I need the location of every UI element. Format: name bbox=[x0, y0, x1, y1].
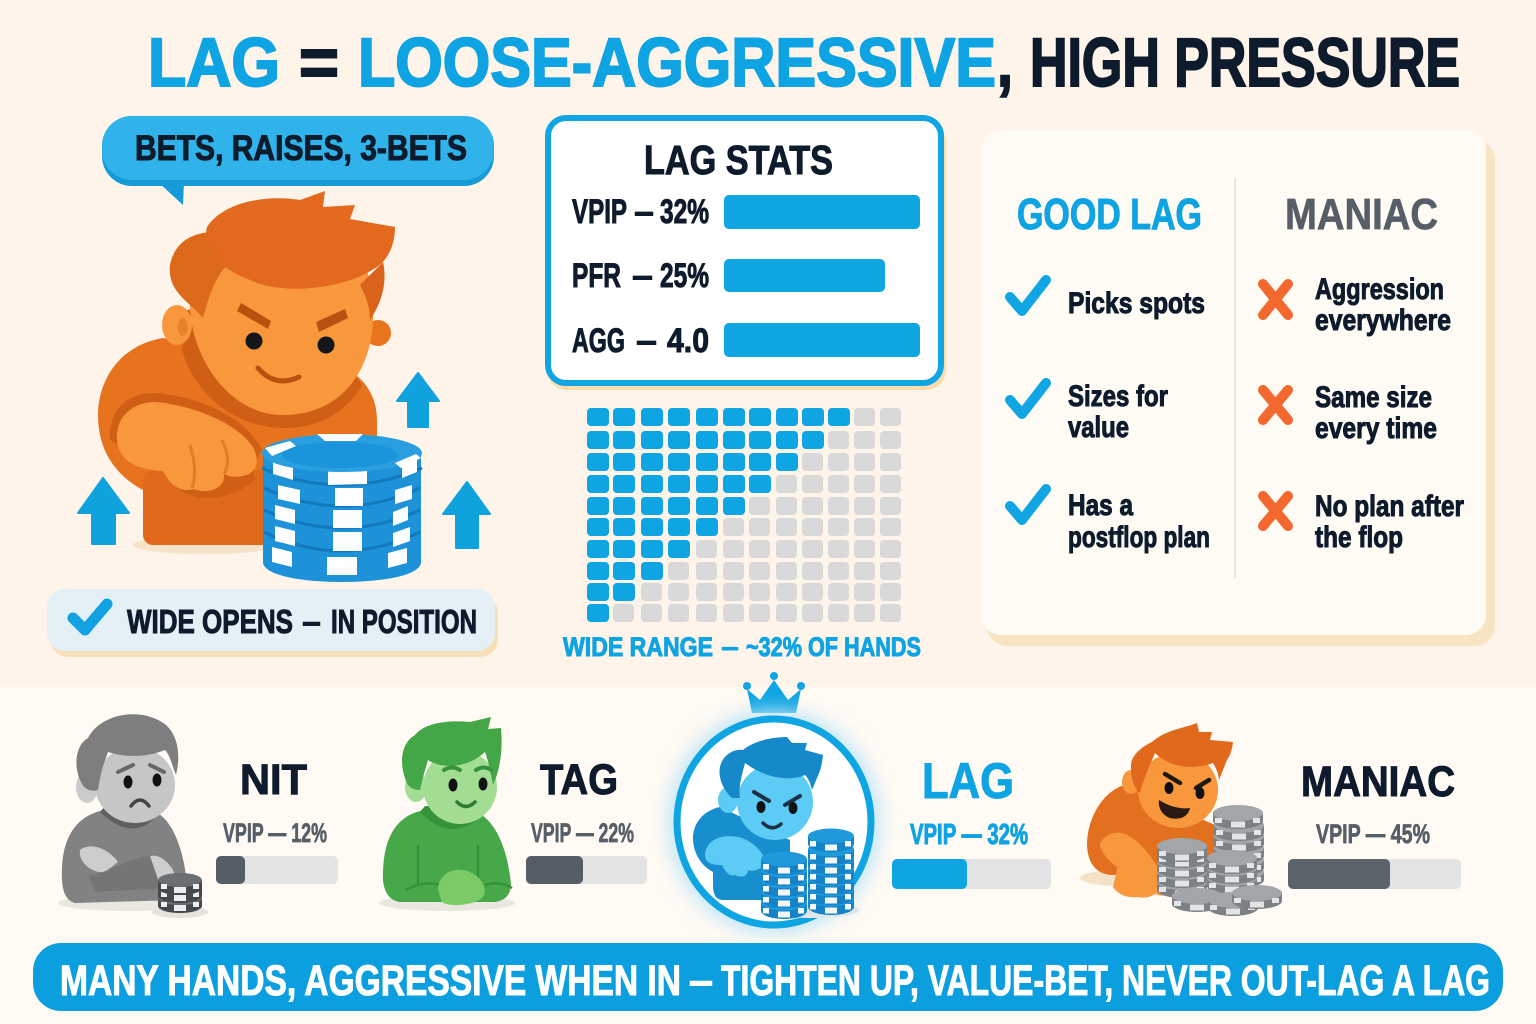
bar: maniac VPIP bbox=[1288, 859, 1461, 889]
item: sizes for value bbox=[1010, 380, 1168, 444]
hand range grid bbox=[587, 408, 901, 622]
label: LAG bbox=[892, 753, 1051, 889]
stat: AGG: 4.0 bbox=[667, 322, 709, 360]
bottom band background bbox=[0, 687, 1536, 1024]
icon: crown bbox=[743, 672, 805, 713]
column: good LAG bbox=[1010, 190, 1210, 554]
icon: check bbox=[73, 604, 107, 630]
icon: blue poker chip stack bbox=[262, 434, 422, 582]
stat: AGG bbox=[572, 322, 920, 360]
item: postflop plan: postflop plan bbox=[1068, 521, 1210, 554]
item: aggression everywhere bbox=[1263, 273, 1451, 337]
grid caption bbox=[563, 632, 921, 662]
item: picks spots: Picks spots bbox=[1068, 287, 1205, 320]
grid caption: WIDE RANGE bbox=[563, 632, 713, 662]
label: NIT: NIT bbox=[240, 756, 307, 804]
title: LOOSE-AGGRESSIVE bbox=[358, 24, 996, 101]
icon: up arrow left bbox=[78, 478, 129, 544]
item: sizes for value: value bbox=[1068, 411, 1129, 444]
item: postflop plan: Has a bbox=[1068, 489, 1133, 522]
stat: AGG: AGG bbox=[572, 322, 625, 360]
item: no plan bbox=[1263, 490, 1464, 554]
title: , bbox=[997, 24, 1013, 101]
figure: LAG player in ring bbox=[668, 710, 880, 934]
stat: PFR: 25% bbox=[660, 257, 709, 295]
callout: wide opens in position: — bbox=[303, 603, 320, 640]
panel: good LAG vs maniac bbox=[981, 130, 1495, 646]
column: maniac bbox=[1263, 190, 1464, 554]
item: same size: every time bbox=[1315, 412, 1437, 445]
speech bubble: bets, raises, 3-bets bbox=[102, 116, 494, 205]
item: same size bbox=[1263, 381, 1437, 445]
label: maniac: MANIAC bbox=[1301, 758, 1455, 806]
icon: small dark chip stack bbox=[152, 873, 208, 918]
title bbox=[148, 24, 1460, 101]
panel: LAG stats: LAG STATS bbox=[644, 137, 833, 183]
panel: LAG stats bbox=[547, 118, 946, 390]
item: same size: Same size bbox=[1315, 381, 1432, 414]
item: aggression everywhere: everywhere bbox=[1315, 304, 1451, 337]
item: postflop plan bbox=[1010, 489, 1210, 554]
bar: LAG VPIP bbox=[892, 859, 1051, 889]
figure: maniac player bbox=[1080, 723, 1233, 898]
stat: AGG: — bbox=[637, 322, 656, 360]
stat: PFR: — bbox=[633, 257, 652, 295]
icon: blue chip stacks bbox=[761, 828, 860, 919]
stat: PFR bbox=[572, 257, 885, 295]
speech bubble: bets, raises, 3-bets: BETS, RAISES, 3-BETS bbox=[135, 129, 467, 168]
title: LAG bbox=[148, 24, 280, 101]
takeaway banner bbox=[33, 943, 1503, 1011]
stat: PFR: PFR bbox=[572, 257, 621, 295]
label: LAG: LAG bbox=[922, 753, 1014, 809]
icon: grey chip piles bbox=[1157, 805, 1282, 916]
label: LAG: VPIP — 32% bbox=[910, 819, 1028, 851]
stat: VPIP: — bbox=[635, 193, 653, 231]
bar: TAG VPIP bbox=[526, 856, 647, 884]
label: maniac: VPIP — 45% bbox=[1316, 819, 1430, 849]
label: NIT bbox=[216, 756, 338, 884]
takeaway banner: — bbox=[690, 957, 712, 1005]
column: good LAG: GOOD LAG bbox=[1017, 190, 1202, 239]
stat: VPIP: VPIP bbox=[572, 193, 627, 231]
item: picks spots bbox=[1010, 280, 1205, 320]
callout: wide opens in position bbox=[47, 589, 498, 657]
item: aggression everywhere: Aggression bbox=[1315, 273, 1444, 306]
figure: NIT player bbox=[58, 714, 202, 911]
callout: wide opens in position: WIDE OPENS bbox=[127, 603, 293, 640]
label: TAG bbox=[526, 756, 647, 884]
icon: up arrow top right bbox=[397, 373, 439, 427]
grid caption: — bbox=[722, 632, 738, 662]
bar: NIT VPIP bbox=[216, 856, 338, 884]
stat: VPIP: 32% bbox=[660, 193, 709, 231]
hero character: orange player bbox=[98, 191, 395, 554]
item: no plan: No plan after bbox=[1315, 490, 1464, 523]
item: no plan: the flop bbox=[1315, 521, 1403, 554]
figure: TAG player bbox=[379, 717, 515, 911]
grid caption: ~32% OF HANDS bbox=[746, 632, 921, 662]
label: TAG: TAG bbox=[540, 756, 618, 804]
callout: wide opens in position: IN POSITION bbox=[331, 603, 477, 640]
label: maniac bbox=[1288, 758, 1461, 889]
icon: up arrow bottom right bbox=[443, 482, 490, 548]
label: TAG: VPIP — 22% bbox=[531, 818, 634, 848]
item: sizes for value: Sizes for bbox=[1068, 380, 1168, 413]
title: = bbox=[299, 24, 339, 101]
stat: VPIP bbox=[572, 193, 920, 231]
column: maniac: MANIAC bbox=[1285, 190, 1438, 239]
label: NIT: VPIP — 12% bbox=[223, 818, 327, 848]
takeaway banner: MANY HANDS, AGGRESSIVE WHEN IN bbox=[60, 957, 681, 1005]
